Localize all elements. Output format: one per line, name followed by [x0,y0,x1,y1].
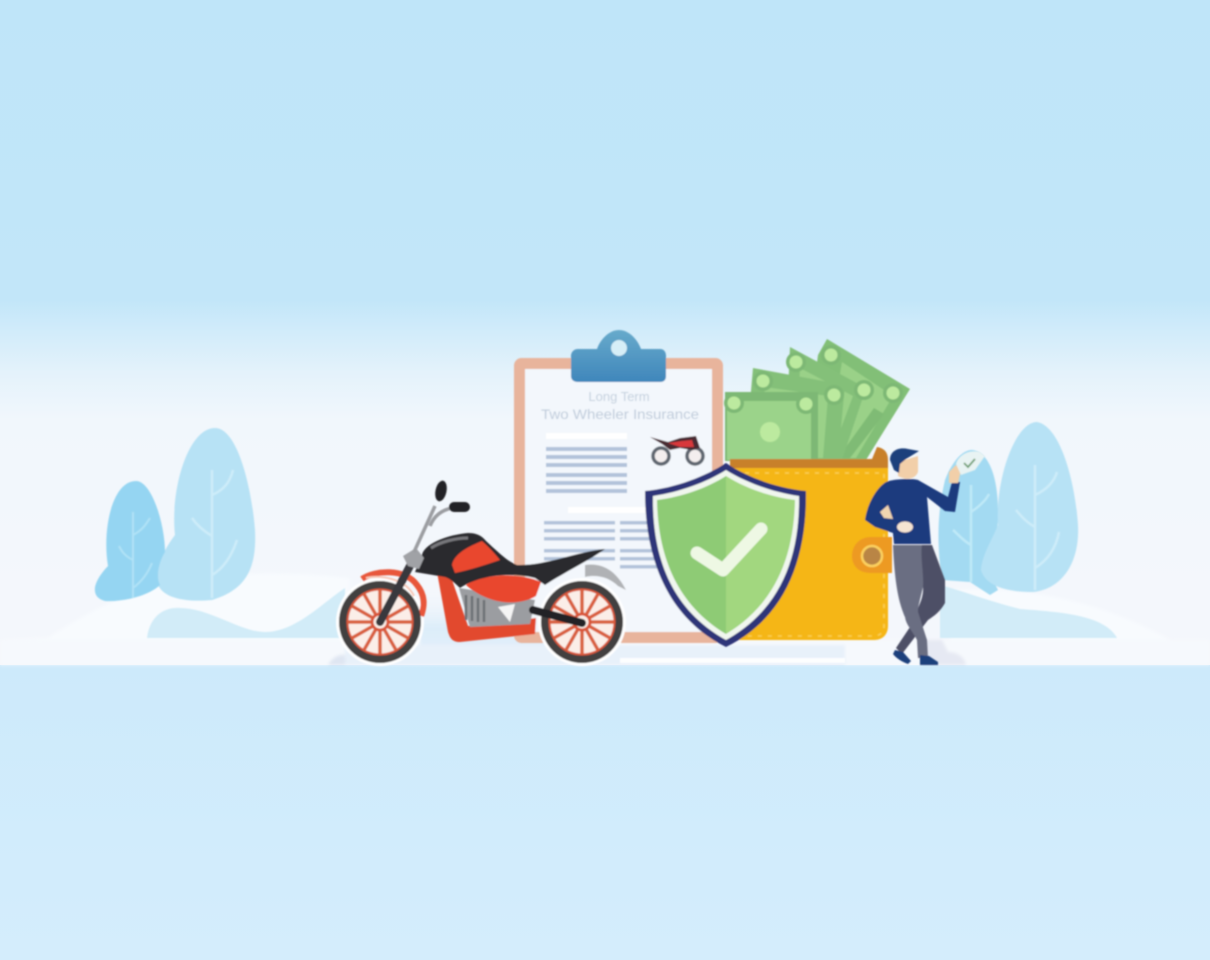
rear fender [585,564,626,590]
rear wheel [545,585,619,659]
wallet clasp [852,537,892,573]
trees: left group [95,428,345,638]
hat and hair [890,448,919,473]
clipboard: Two Wheeler Insurance [541,407,699,422]
rear swing arm [533,610,582,623]
handlebars [414,506,452,552]
wallet [728,447,892,640]
front fender [362,572,424,616]
front wheel [343,585,417,659]
check mark [697,529,761,570]
white hills [0,574,1210,665]
person leaning on wallet [865,448,985,665]
mirror and grip [433,480,449,502]
hill: left [147,588,345,638]
clipboard title: Long Term [588,389,650,404]
tree: large right [981,422,1078,592]
tree: small left [95,481,165,601]
raised hand [949,465,961,483]
document in hand [956,451,985,475]
hands on belly [880,505,893,519]
tree: large left [157,428,255,601]
bill 2 [745,368,845,460]
clipboard clip [571,330,666,382]
dark leg [896,545,945,654]
trees: right group [938,422,1117,638]
bill 1 [725,392,818,461]
light leg [893,545,928,658]
hill: right [940,585,1117,638]
lower tank [466,576,541,602]
bill 4 [805,339,910,460]
shield with check mark [645,463,806,647]
clipboard text lines [544,433,660,568]
money bills [724,339,910,461]
bill 3 [785,347,866,460]
torso and arms [865,479,960,544]
clipboard board [520,364,718,638]
ground highlight [620,658,845,663]
lower background band [0,665,1210,960]
tank red [452,541,500,573]
clipboard [520,330,718,638]
motorcycle [336,480,626,666]
shoes [893,650,911,664]
frame [437,572,536,642]
fork [380,564,411,622]
engine [459,588,535,627]
body black [415,533,605,588]
tree: small right [938,450,998,595]
small motorcycle icon [650,436,703,464]
headlamp bracket [403,548,424,569]
head [898,456,918,479]
background sky [0,0,1210,666]
